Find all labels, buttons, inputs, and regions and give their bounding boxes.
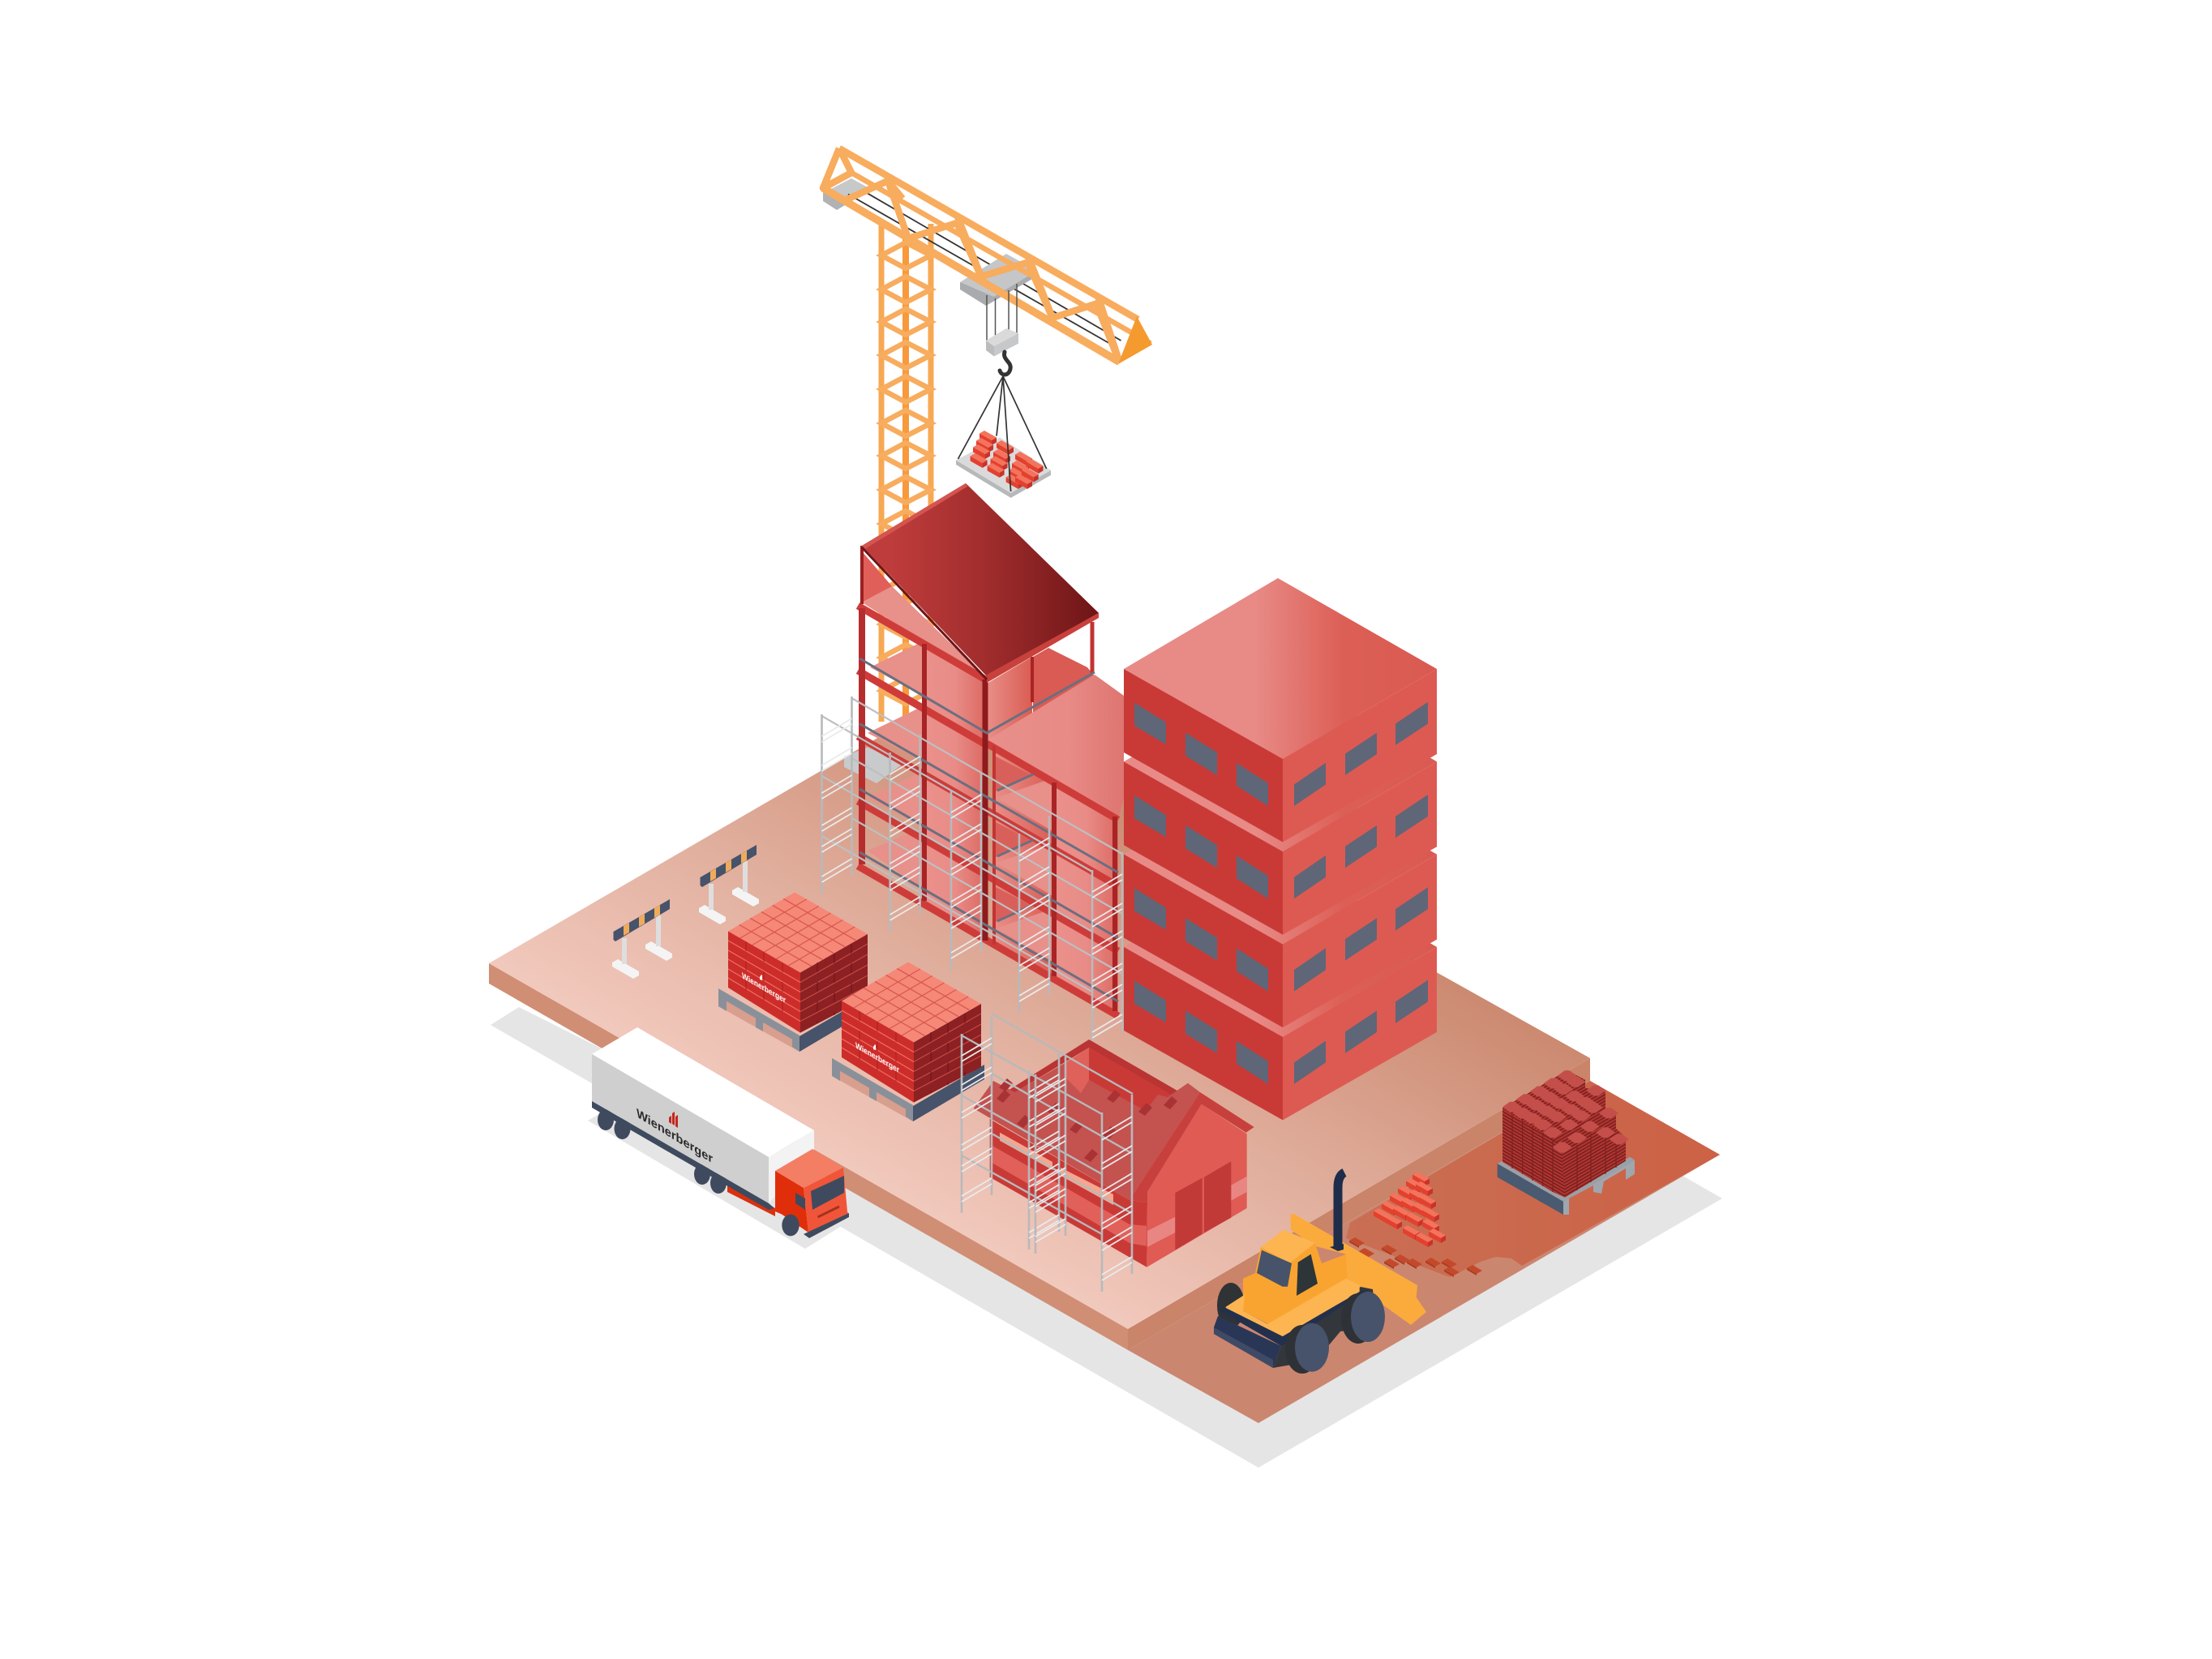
scattered flat bricks: [1349, 1237, 1482, 1277]
cottage rails: [962, 1014, 1133, 1234]
long rails: [822, 698, 1122, 992]
cab front window: [1257, 1250, 1292, 1287]
roof trim: [1130, 1092, 1254, 1202]
bay walls: [924, 641, 1118, 1013]
lower ground plate: [1128, 1081, 1720, 1423]
navy hull: [1218, 1289, 1369, 1346]
stack of roof tiles on pallet: [1498, 1070, 1635, 1215]
floor slab edges: [858, 606, 1118, 1016]
cab side window: [1297, 1254, 1318, 1296]
upper side roof deck: [987, 675, 1124, 818]
pallet label: Wienerberger: [855, 1041, 900, 1075]
pallet logo: [760, 975, 762, 980]
road barrier right: [699, 845, 759, 924]
jib end cap: [1118, 316, 1152, 364]
left wall bands: [991, 1133, 1147, 1246]
pile of loose bricks: [1374, 1172, 1446, 1247]
inner lit wall: [1065, 1048, 1089, 1093]
columns: [862, 546, 1115, 1011]
truck shadow: [588, 1095, 851, 1249]
gable roof: [862, 483, 1099, 683]
trailer label: Wienerberger: [637, 1106, 714, 1167]
roof tiles: [997, 1078, 1177, 1162]
crane mast: [881, 224, 931, 722]
scaffolding around frame building: [822, 697, 1122, 1049]
pallet logo: [873, 1044, 876, 1050]
crane trolley: [960, 254, 1038, 306]
barn door: [1175, 1161, 1231, 1250]
trailer box: [592, 1027, 814, 1210]
front bumper: [1214, 1316, 1281, 1368]
tile tops: [1503, 1070, 1629, 1153]
rear wheel: [1341, 1292, 1385, 1344]
tower crane: [823, 148, 1152, 722]
crane jib: [823, 148, 1151, 362]
left wall: [990, 1119, 1147, 1267]
gable wall: [1147, 1104, 1247, 1267]
crane cables: [848, 193, 1121, 345]
roof slope: [974, 1062, 1200, 1200]
delivery truck: [588, 1027, 851, 1249]
floor 1: [1124, 578, 1437, 842]
blade: [1291, 1214, 1426, 1325]
gable band: [1147, 1177, 1247, 1247]
scaffolding around cottage: [962, 1014, 1133, 1292]
hook: [1000, 352, 1010, 375]
exhaust pipe: [1330, 1172, 1344, 1251]
hoist cables: [987, 284, 1017, 345]
brick pallet 1: [718, 892, 871, 1052]
floor 4: [1124, 856, 1437, 1120]
tile pallet: [1498, 1157, 1635, 1215]
cab roof: [1261, 1230, 1315, 1263]
cottage under construction: [974, 1040, 1254, 1267]
inner back wall: [1089, 1048, 1176, 1121]
bulldozer: [1214, 1172, 1426, 1374]
suspended load: [956, 376, 1051, 498]
hook block: [986, 328, 1018, 357]
tile stack faces: [1503, 1070, 1626, 1198]
rear wheels: [598, 1109, 727, 1194]
brick tower: [1124, 578, 1437, 1120]
brick pallet 2: [832, 962, 984, 1121]
counterweight: [823, 178, 869, 210]
trailer logo: [669, 1112, 678, 1128]
guard rails: [860, 658, 1118, 1001]
undercarriage: [1273, 1287, 1376, 1370]
body: [1243, 1243, 1348, 1324]
brick yard patch: [1346, 1081, 1720, 1277]
floor 3: [1124, 764, 1437, 1027]
far rear wheel: [1217, 1283, 1245, 1328]
road barrier left: [612, 899, 672, 979]
raised platform: [489, 698, 1590, 1350]
floor slabs seen through frame: [868, 641, 1054, 962]
ground shadow: [491, 1007, 1722, 1468]
truck cab: [775, 1149, 849, 1238]
red chassis: [727, 1183, 775, 1216]
deck: [1226, 1279, 1360, 1336]
floor 2: [1124, 671, 1437, 935]
crane base slab: [844, 748, 903, 783]
front wheel: [1285, 1323, 1329, 1374]
pallet label: Wienerberger: [742, 971, 787, 1005]
back roof trim: [1008, 1040, 1181, 1097]
gable interior: [862, 551, 987, 681]
timber-frame building under construction: [858, 483, 1124, 1016]
